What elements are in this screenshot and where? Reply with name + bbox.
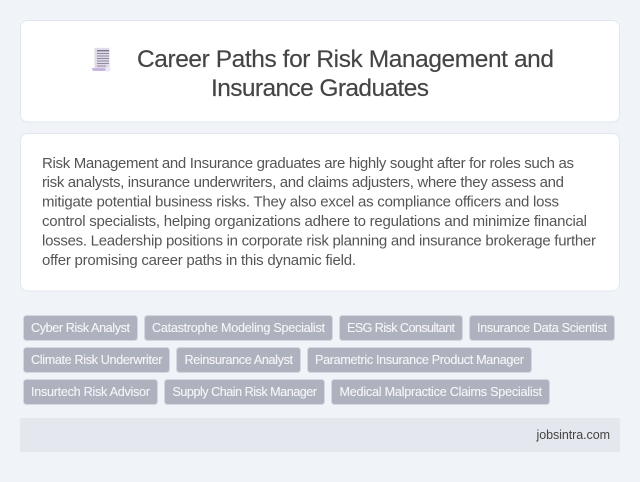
text block: description: offer promising career paths in this dynamic field. [42, 252, 356, 269]
tag: Insurtech Risk Advisor [24, 380, 158, 404]
text block: description [42, 155, 596, 269]
panel: description [20, 134, 620, 291]
tag: Supply Chain Risk Manager [164, 380, 324, 404]
tag: Cyber Risk Analyst [24, 316, 138, 340]
tag: Parametric Insurance Product Manager [308, 348, 532, 372]
tag: Climate Risk Underwriter: Climate Risk Underwriter [31, 353, 162, 367]
footer [20, 418, 620, 452]
title [137, 46, 554, 102]
tag: Medical Malpractice Claims Specialist: Medical Malpractice Claims Specialist [340, 385, 542, 399]
text block: description: Risk Management and Insurance graduates are highly sought after for roles such as [42, 155, 574, 172]
text block: description: losses. Leadership positions in corporate risk planning and insurance brokerage further [42, 232, 596, 250]
tag: Medical Malpractice Claims Specialist [332, 380, 550, 404]
title: Insurance Graduates [211, 75, 429, 102]
tag: Reinsurance Analyst: Reinsurance Analyst [184, 353, 294, 367]
tag: Insurance Data Scientist [470, 316, 614, 340]
tag: Catastrophe Modeling Specialist [144, 316, 332, 340]
tag: Climate Risk Underwriter [24, 348, 170, 372]
tag: ESG Risk Consultant [340, 316, 462, 340]
tag: ESG Risk Consultant: ESG Risk Consultant [347, 321, 456, 335]
tag: Insurtech Risk Advisor: Insurtech Risk Advisor [31, 385, 150, 399]
tag: Parametric Insurance Product Manager: Parametric Insurance Product Manager [315, 353, 524, 367]
icon: paper scroll document [92, 48, 110, 72]
tag: Reinsurance Analyst [176, 348, 300, 372]
text block: description: control specialists, helping organizations adhere to regulations and minimize financial [42, 213, 587, 230]
footer text: site name: jobsintra.com [536, 428, 610, 442]
tag: Cyber Risk Analyst: Cyber Risk Analyst [31, 321, 130, 335]
text block: description: mitigate potential business risks. They also excel as compliance officers and loss [42, 194, 559, 210]
tag: Supply Chain Risk Manager: Supply Chain Risk Manager [172, 385, 317, 399]
tag: Catastrophe Modeling Specialist: Catastrophe Modeling Specialist [152, 321, 326, 335]
title: Career Paths for Risk Management and [137, 46, 554, 73]
text block: description: risk analysts, insurance underwriters, and claims adjusters, where they assess and [42, 174, 564, 191]
tag: Insurance Data Scientist: Insurance Data Scientist [477, 321, 608, 335]
panel: header [20, 20, 620, 122]
tag list [24, 316, 614, 404]
